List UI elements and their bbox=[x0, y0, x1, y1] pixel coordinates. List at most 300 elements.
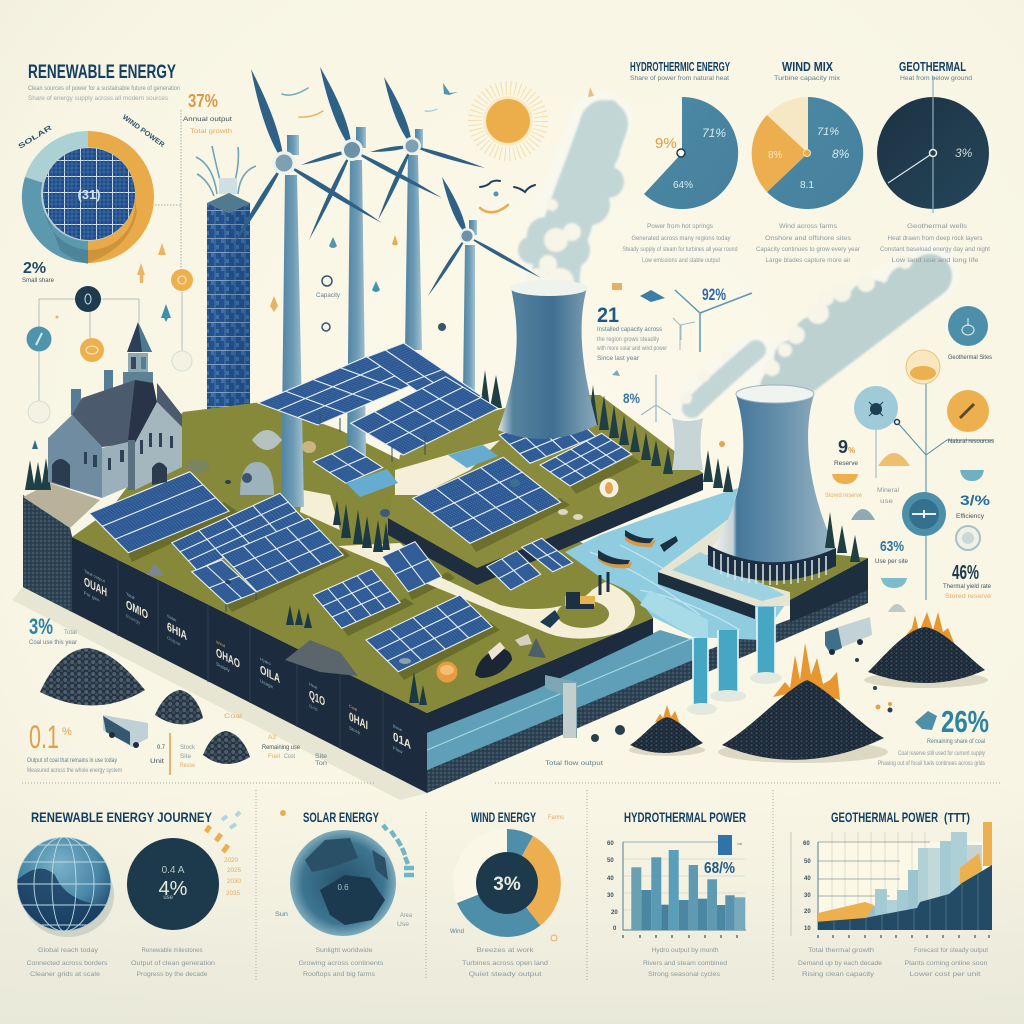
cooling tower grille bbox=[708, 545, 836, 581]
boats bbox=[598, 530, 678, 568]
side wall labels: OILA bbox=[260, 662, 280, 686]
side wall labels: Coal bbox=[349, 703, 357, 712]
stat 26%: Coal reserve still used for current supply bbox=[898, 751, 985, 757]
pie chart: wind mix: 8% bbox=[768, 150, 783, 161]
small drops and tags: Capacity bbox=[316, 293, 340, 299]
wind notes: Quiet steady output bbox=[468, 972, 542, 978]
small arrows left bbox=[32, 243, 171, 449]
side wall labels: OHAO bbox=[216, 645, 240, 671]
donut chart: solar share bbox=[22, 131, 154, 264]
side wall labels: Total bbox=[126, 591, 134, 600]
stat 9% bbox=[834, 437, 859, 467]
journey notes: Output of clean generation bbox=[131, 961, 215, 967]
bar chart bbox=[607, 835, 746, 938]
small arc labels: 2035 bbox=[226, 891, 241, 897]
trees by church bbox=[25, 458, 51, 490]
geothermal notes: Lower cost per unit bbox=[910, 972, 981, 978]
river ripples bbox=[590, 545, 740, 630]
wind title: WIND ENERGY bbox=[471, 809, 536, 825]
icon: blue ring bbox=[902, 492, 946, 536]
small left stat notes: Site bbox=[315, 754, 328, 760]
axis values: 50 bbox=[607, 858, 614, 864]
donut centre value: (31) bbox=[77, 187, 101, 202]
stat 46%: Stored reserve bbox=[945, 594, 992, 600]
panel: renewable energy journey bbox=[17, 809, 242, 978]
sun bbox=[475, 88, 541, 154]
wind labels: Wind bbox=[450, 929, 464, 935]
solar notes bbox=[298, 948, 384, 978]
wind pie title: Turbine capacity mix bbox=[774, 76, 840, 82]
side wall labels: Flow bbox=[393, 745, 403, 756]
coal pile with fire right bbox=[864, 612, 988, 688]
stat 37%: 37% bbox=[188, 91, 218, 111]
stat 26%: 26% bbox=[941, 704, 989, 739]
small left stat notes: Reuse bbox=[180, 763, 196, 769]
light columns bbox=[865, 832, 982, 930]
globe labels: Area bbox=[400, 913, 413, 919]
intro text: Clean sources of power for a sustainable future of generation bbox=[28, 86, 180, 92]
stat 3% left: Coal use this year bbox=[29, 640, 77, 646]
dark strip under lawn bbox=[427, 618, 653, 733]
geothermal notes: Forecast for steady output bbox=[914, 948, 988, 954]
pie chart: hydrothermal: 64% bbox=[673, 180, 693, 191]
journey notes: Connected across borders bbox=[26, 961, 108, 967]
axis values: 0 bbox=[613, 926, 617, 932]
geothermal pie notes: Low land use and long life bbox=[892, 258, 979, 264]
stat 26%: Phasing out of fossil fuels continues across grids bbox=[878, 761, 985, 767]
bottom band tint bbox=[0, 780, 1024, 1024]
earth globe: 0.6 bbox=[337, 883, 349, 892]
side wall labels: Energy bbox=[126, 613, 141, 626]
solar tower bbox=[196, 146, 256, 462]
axis values: 50 bbox=[804, 859, 811, 865]
turbine towers bbox=[281, 127, 477, 507]
orange label: Stored reserve bbox=[825, 493, 863, 499]
stat 2%: Small share bbox=[22, 278, 55, 284]
side wall labels: For gen bbox=[84, 590, 100, 604]
wind notes bbox=[462, 948, 548, 978]
area chart bbox=[791, 822, 992, 938]
small arc labels: 2025 bbox=[227, 868, 242, 874]
pie notes: Generated across many regions today bbox=[632, 236, 730, 242]
earth globe bbox=[290, 830, 396, 936]
blue bowl bbox=[960, 470, 984, 481]
geothermal notes: Plants coming online soon bbox=[904, 961, 988, 967]
side wall labels: Supply bbox=[216, 661, 230, 674]
stat 21 and small turbines: 21 bbox=[597, 304, 619, 327]
channel highlight bbox=[427, 638, 693, 750]
block: dark front-left face bbox=[23, 495, 427, 793]
grey dome bbox=[851, 509, 875, 520]
tree lines bbox=[876, 380, 994, 600]
stat 21 and small turbines: 8% bbox=[623, 390, 640, 406]
geothermal pie title: GEOTHERMAL bbox=[899, 59, 966, 74]
side wall labels: Wind bbox=[216, 639, 226, 649]
orange pile bbox=[878, 453, 910, 466]
block ground shadow bbox=[12, 587, 427, 800]
axis values: 40 bbox=[804, 876, 811, 882]
stat 21 and small turbines: the region grows steadily bbox=[597, 337, 659, 343]
geothermal notes: Demand up by each decade bbox=[798, 961, 883, 967]
geothermal pie title bbox=[899, 59, 972, 82]
pie title bbox=[630, 59, 730, 82]
stat 46%: Thermal yield rate bbox=[943, 584, 992, 590]
axis ticks bbox=[623, 935, 737, 938]
stat 3% left: 3% bbox=[29, 614, 53, 639]
wind notes: Turbines across open land bbox=[462, 961, 548, 967]
trees behind bbox=[480, 370, 673, 474]
intro text bbox=[28, 86, 180, 102]
pie chart: wind mix: 71% bbox=[817, 126, 839, 138]
block: grain corner bbox=[23, 495, 72, 612]
axis values bbox=[607, 841, 618, 932]
panel: wind energy bbox=[450, 809, 564, 978]
small label bbox=[877, 488, 899, 505]
small left stat notes: Remaining use bbox=[262, 745, 301, 751]
wind pie title: WIND MIX bbox=[782, 59, 833, 74]
stat 37% bbox=[183, 91, 232, 135]
stat 21 and small turbines: 92% bbox=[702, 285, 726, 304]
small left stat notes: 0.7 bbox=[157, 745, 166, 751]
hydro notes: Strong seasonal cycles bbox=[648, 972, 720, 978]
stat 21 and small turbines: Since last year bbox=[597, 356, 639, 362]
side wall labels: Base bbox=[393, 723, 403, 733]
centre small caption: Total flow output bbox=[545, 761, 603, 767]
small drops and tags bbox=[270, 235, 446, 331]
stat 2% bbox=[22, 260, 55, 284]
smoke from cooling towers bbox=[518, 100, 930, 410]
bar chart callout: 68/% bbox=[704, 860, 735, 877]
wall seams bbox=[118, 560, 383, 771]
geothermal pie notes: Heat drawn from deep rock layers bbox=[888, 236, 982, 242]
geothermal title: GEOTHERMAL POWER bbox=[831, 809, 938, 825]
hydro notes bbox=[643, 948, 727, 978]
journey notes bbox=[26, 948, 215, 978]
stat 21 and small turbines bbox=[596, 283, 752, 447]
hydro notes: Rivers and steam combined bbox=[643, 961, 727, 967]
stat 21 and small turbines: Installed capacity across bbox=[597, 327, 662, 333]
stat 3% right: 3/% bbox=[960, 492, 991, 508]
stat 9%: Reserve bbox=[834, 461, 859, 467]
dark columns bbox=[834, 874, 978, 930]
side wall labels: 0HAI bbox=[349, 709, 368, 733]
side wall labels bbox=[84, 568, 411, 760]
stat 0.1%: % bbox=[62, 726, 72, 738]
stat 26% bbox=[878, 704, 989, 767]
tree cluster centre bbox=[333, 500, 390, 552]
side wall labels: 01A bbox=[393, 729, 411, 752]
journey notes: Progress by the decade bbox=[136, 972, 208, 978]
side wall labels: Hydro bbox=[260, 656, 271, 667]
pie title: Share of power from natural heat bbox=[630, 76, 729, 82]
arc dashes bbox=[206, 812, 240, 852]
stat 3% right bbox=[956, 492, 991, 520]
channel water bbox=[427, 630, 693, 770]
dark area bbox=[818, 865, 992, 930]
turbine blades bbox=[232, 67, 541, 296]
coal pile with fire large bbox=[718, 643, 888, 763]
stat 46%: 46% bbox=[952, 562, 979, 584]
wind pie notes: Capacity continues to grow every year bbox=[756, 247, 860, 253]
globe labels: Use bbox=[397, 922, 410, 928]
chimneys bbox=[71, 370, 113, 415]
pie chart: wind mix bbox=[752, 59, 863, 264]
donut labels: SOLAR bbox=[17, 125, 53, 151]
pie chart: hydrothermal: 9% bbox=[655, 135, 677, 152]
donut chart: 3% bbox=[493, 874, 521, 895]
pie notes: Steady supply of steam for turbines all year round bbox=[622, 247, 738, 253]
side wall labels: Solar bbox=[167, 613, 177, 623]
main lawn bbox=[72, 402, 653, 713]
small left stat notes: Site bbox=[180, 754, 192, 760]
block: right base gravel bbox=[427, 590, 868, 793]
small left stat notes: Unit bbox=[150, 759, 164, 765]
node bbox=[894, 420, 900, 424]
teal circle label: Geothermal Sites bbox=[948, 355, 992, 361]
cooling tower back bbox=[498, 280, 597, 439]
side wall labels: Stock bbox=[349, 725, 361, 737]
panel legs bbox=[226, 412, 425, 612]
journey notes: Renewable milestones bbox=[142, 948, 202, 954]
pie notes: Low emissions and stable output bbox=[642, 258, 720, 264]
coal pile with fire small bbox=[629, 705, 705, 756]
side wall labels: OMIO bbox=[126, 597, 148, 622]
hydro notes: Hydro output by month bbox=[652, 948, 718, 954]
stat 2%: 2% bbox=[23, 260, 46, 277]
geothermal pie notes: Constant baseload energy day and night bbox=[880, 247, 990, 253]
coal pile left small bbox=[203, 731, 250, 764]
lawn shadows bbox=[128, 502, 500, 680]
cooling tower small bbox=[672, 418, 703, 470]
small left stat notes: A3 bbox=[268, 735, 277, 741]
pie notes bbox=[622, 224, 738, 264]
geothermal title: (TTT) bbox=[944, 810, 970, 825]
right side info tree bbox=[825, 306, 994, 612]
small label: Mineral bbox=[877, 488, 899, 494]
tree cluster lower bbox=[286, 605, 427, 705]
antennae bbox=[196, 146, 256, 196]
orange series bbox=[818, 822, 992, 923]
blue bowl lower bbox=[881, 578, 907, 588]
upper platform side bbox=[388, 473, 703, 585]
icon circles left bbox=[26, 269, 193, 423]
geothermal pie notes bbox=[880, 224, 990, 264]
small left stat notes bbox=[150, 714, 328, 775]
axis values: 20 bbox=[611, 910, 618, 916]
solar panels bbox=[89, 343, 632, 672]
stat 21 and small turbines: with more solar and wind power bbox=[596, 346, 667, 352]
grey circle bbox=[956, 526, 980, 550]
stat 9%: 9% bbox=[838, 437, 855, 457]
stat 0.1%: Measured across the whole energy system bbox=[27, 768, 122, 774]
bar chart callout: val bbox=[737, 841, 742, 846]
axis values bbox=[803, 841, 811, 932]
wind notes: Breezes at work bbox=[476, 948, 535, 954]
side wall labels: Output bbox=[167, 635, 181, 648]
solar title: SOLAR ENERGY bbox=[303, 809, 379, 825]
stat 63% bbox=[875, 538, 909, 565]
small left stat notes: Cost bbox=[284, 754, 295, 760]
church bbox=[25, 322, 182, 498]
panel: geothermal power bbox=[791, 809, 992, 978]
small label: use bbox=[880, 499, 894, 505]
hydro title: HYDROTHERMAL POWER bbox=[624, 809, 746, 825]
panel: solar energy bbox=[275, 809, 414, 978]
journey title: RENEWABLE ENERGY JOURNEY bbox=[31, 809, 213, 825]
globe labels: Sun bbox=[275, 912, 288, 918]
bar chart callout bbox=[704, 835, 742, 877]
pie chart: wind mix: 8% bbox=[832, 147, 850, 161]
section dividers bbox=[22, 783, 1000, 980]
coal truck left bbox=[103, 715, 148, 748]
side wall labels: Total output bbox=[84, 568, 105, 584]
wind pie notes: Onshore and offshore sites bbox=[765, 236, 851, 242]
side wall labels: Grid bbox=[309, 703, 318, 713]
smoke plume 3 bbox=[680, 347, 756, 410]
geothermal pie title: Heat from below ground bbox=[900, 76, 972, 82]
geothermal pie notes: Geothermal wells bbox=[907, 224, 967, 230]
geothermal notes: Total thermal growth bbox=[808, 948, 874, 954]
dark stat circle: use bbox=[163, 895, 174, 901]
dark stat circle bbox=[127, 838, 219, 930]
title: RENEWABLE ENERGY bbox=[28, 62, 176, 83]
loose coal bbox=[591, 658, 892, 742]
small left stat notes: Coal bbox=[224, 714, 242, 720]
power platform bbox=[658, 520, 868, 622]
axis values: 30 bbox=[607, 893, 614, 899]
windows bbox=[84, 433, 173, 470]
pie notes: Power from hot springs bbox=[647, 224, 713, 230]
coal truck right bbox=[825, 617, 872, 655]
trees around front tower bbox=[703, 450, 860, 562]
icon: teal circle bbox=[948, 306, 988, 346]
dark stat circle: 4% bbox=[159, 878, 188, 900]
arc dashes bbox=[383, 825, 414, 875]
paths bbox=[300, 440, 635, 639]
intro text: Share of energy supply across all modern sources bbox=[28, 96, 168, 102]
donut chart bbox=[453, 829, 561, 937]
walls bbox=[48, 415, 102, 498]
axis values: 60 bbox=[803, 841, 810, 847]
icon: orange sphere bbox=[906, 350, 940, 384]
wind labels: Farms bbox=[548, 815, 564, 821]
excavator bbox=[540, 572, 608, 628]
solar notes: Sunlight worldwide bbox=[316, 948, 373, 954]
geothermal notes bbox=[798, 948, 988, 978]
side wall labels: Q1O bbox=[309, 687, 325, 709]
header: renewable energy bbox=[28, 62, 180, 102]
axis values: 10 bbox=[804, 926, 811, 932]
label: Natural resources bbox=[948, 439, 994, 445]
panel: hydrothermal power bbox=[607, 809, 746, 978]
side wall labels: Usage bbox=[260, 678, 273, 691]
small arc labels bbox=[224, 858, 242, 897]
axis values: 60 bbox=[607, 841, 614, 847]
smoke plume 2 bbox=[764, 255, 930, 388]
icon: orange circle bbox=[947, 390, 989, 432]
connector lines bbox=[39, 110, 182, 402]
path inner lawn bbox=[557, 600, 609, 628]
waterfalls bbox=[545, 590, 782, 738]
small left stat notes: Fuel bbox=[268, 754, 280, 760]
upper platform lawn bbox=[388, 395, 703, 568]
wind pie notes bbox=[756, 224, 860, 264]
stat 3% right: Efficiency bbox=[956, 514, 984, 520]
dark stat circle: 0.4 A bbox=[162, 865, 185, 876]
donut labels bbox=[17, 114, 165, 151]
stat 63%: 63% bbox=[880, 538, 904, 555]
stat 0.1%: 0.1 bbox=[29, 719, 59, 755]
roof bbox=[72, 380, 157, 447]
wind pie notes: Large blades capture more air bbox=[766, 258, 850, 264]
smoke plume 1 bbox=[518, 100, 624, 296]
pie chart: geothermal bbox=[877, 59, 990, 264]
pie chart: hydrothermal bbox=[622, 59, 738, 264]
pale dome bbox=[888, 604, 906, 612]
wind pie title bbox=[774, 59, 840, 82]
doors bbox=[52, 459, 167, 488]
river bbox=[565, 488, 790, 640]
side wall labels: 6HIA bbox=[167, 619, 187, 643]
gravel yard bbox=[23, 483, 100, 528]
coal pile left large bbox=[40, 648, 145, 706]
turbine hubs bbox=[272, 137, 475, 244]
small left stat notes: Ton bbox=[315, 761, 327, 767]
stat 3% left: Total bbox=[64, 630, 77, 636]
pie chart: wind mix: 8.1 bbox=[800, 180, 814, 191]
stat 37%: Total growth bbox=[190, 129, 232, 135]
stone cluster by church bbox=[186, 459, 231, 484]
stat 0.1%: Output of coal that remains in use today bbox=[27, 758, 117, 764]
icon: light blue circle bbox=[854, 386, 898, 430]
steeple bbox=[123, 322, 153, 384]
solar notes: Rooftops and big farms bbox=[303, 972, 375, 978]
objects on lawn bbox=[147, 430, 618, 682]
pie chart: geothermal: 3% bbox=[955, 146, 973, 160]
solar notes: Growing across continents bbox=[298, 961, 384, 967]
pie chart: hydrothermal: 71% bbox=[702, 126, 726, 140]
stat 3% left bbox=[29, 614, 77, 646]
globe labels bbox=[275, 912, 413, 928]
coal pile left middle bbox=[155, 690, 203, 724]
wind pie notes: Wind across farms bbox=[779, 224, 837, 230]
axis ticks bbox=[818, 935, 989, 938]
stat 0.1% bbox=[27, 719, 122, 774]
stat 46% bbox=[943, 562, 992, 600]
upper platform shadows bbox=[470, 456, 640, 552]
wind labels bbox=[450, 815, 564, 941]
axis values: 30 bbox=[804, 893, 811, 899]
stat 37%: Annual output bbox=[183, 117, 232, 123]
pie title: HYDROTHERMIC ENERGY bbox=[630, 59, 730, 74]
side wall labels: Heat bbox=[309, 681, 318, 691]
geothermal notes: Rising clean capacity bbox=[802, 972, 874, 978]
birds bbox=[282, 83, 594, 212]
small arc labels: 2020 bbox=[224, 858, 239, 864]
stat 26%: Remaining share of coal bbox=[927, 739, 985, 745]
journey notes: Cleaner grids at scale bbox=[30, 972, 101, 978]
stat 63%: Use per site bbox=[875, 559, 909, 565]
cooling tower front bbox=[708, 385, 836, 585]
donut labels: WIND POWER bbox=[121, 114, 165, 149]
side wall labels: OUAH bbox=[84, 574, 107, 600]
axis values: 40 bbox=[607, 876, 614, 882]
axis values: 20 bbox=[804, 909, 811, 915]
small left stat notes: Stock bbox=[180, 745, 196, 751]
small arc labels: 2030 bbox=[227, 879, 242, 885]
globe bbox=[17, 837, 114, 945]
orange bowl bbox=[832, 474, 858, 484]
